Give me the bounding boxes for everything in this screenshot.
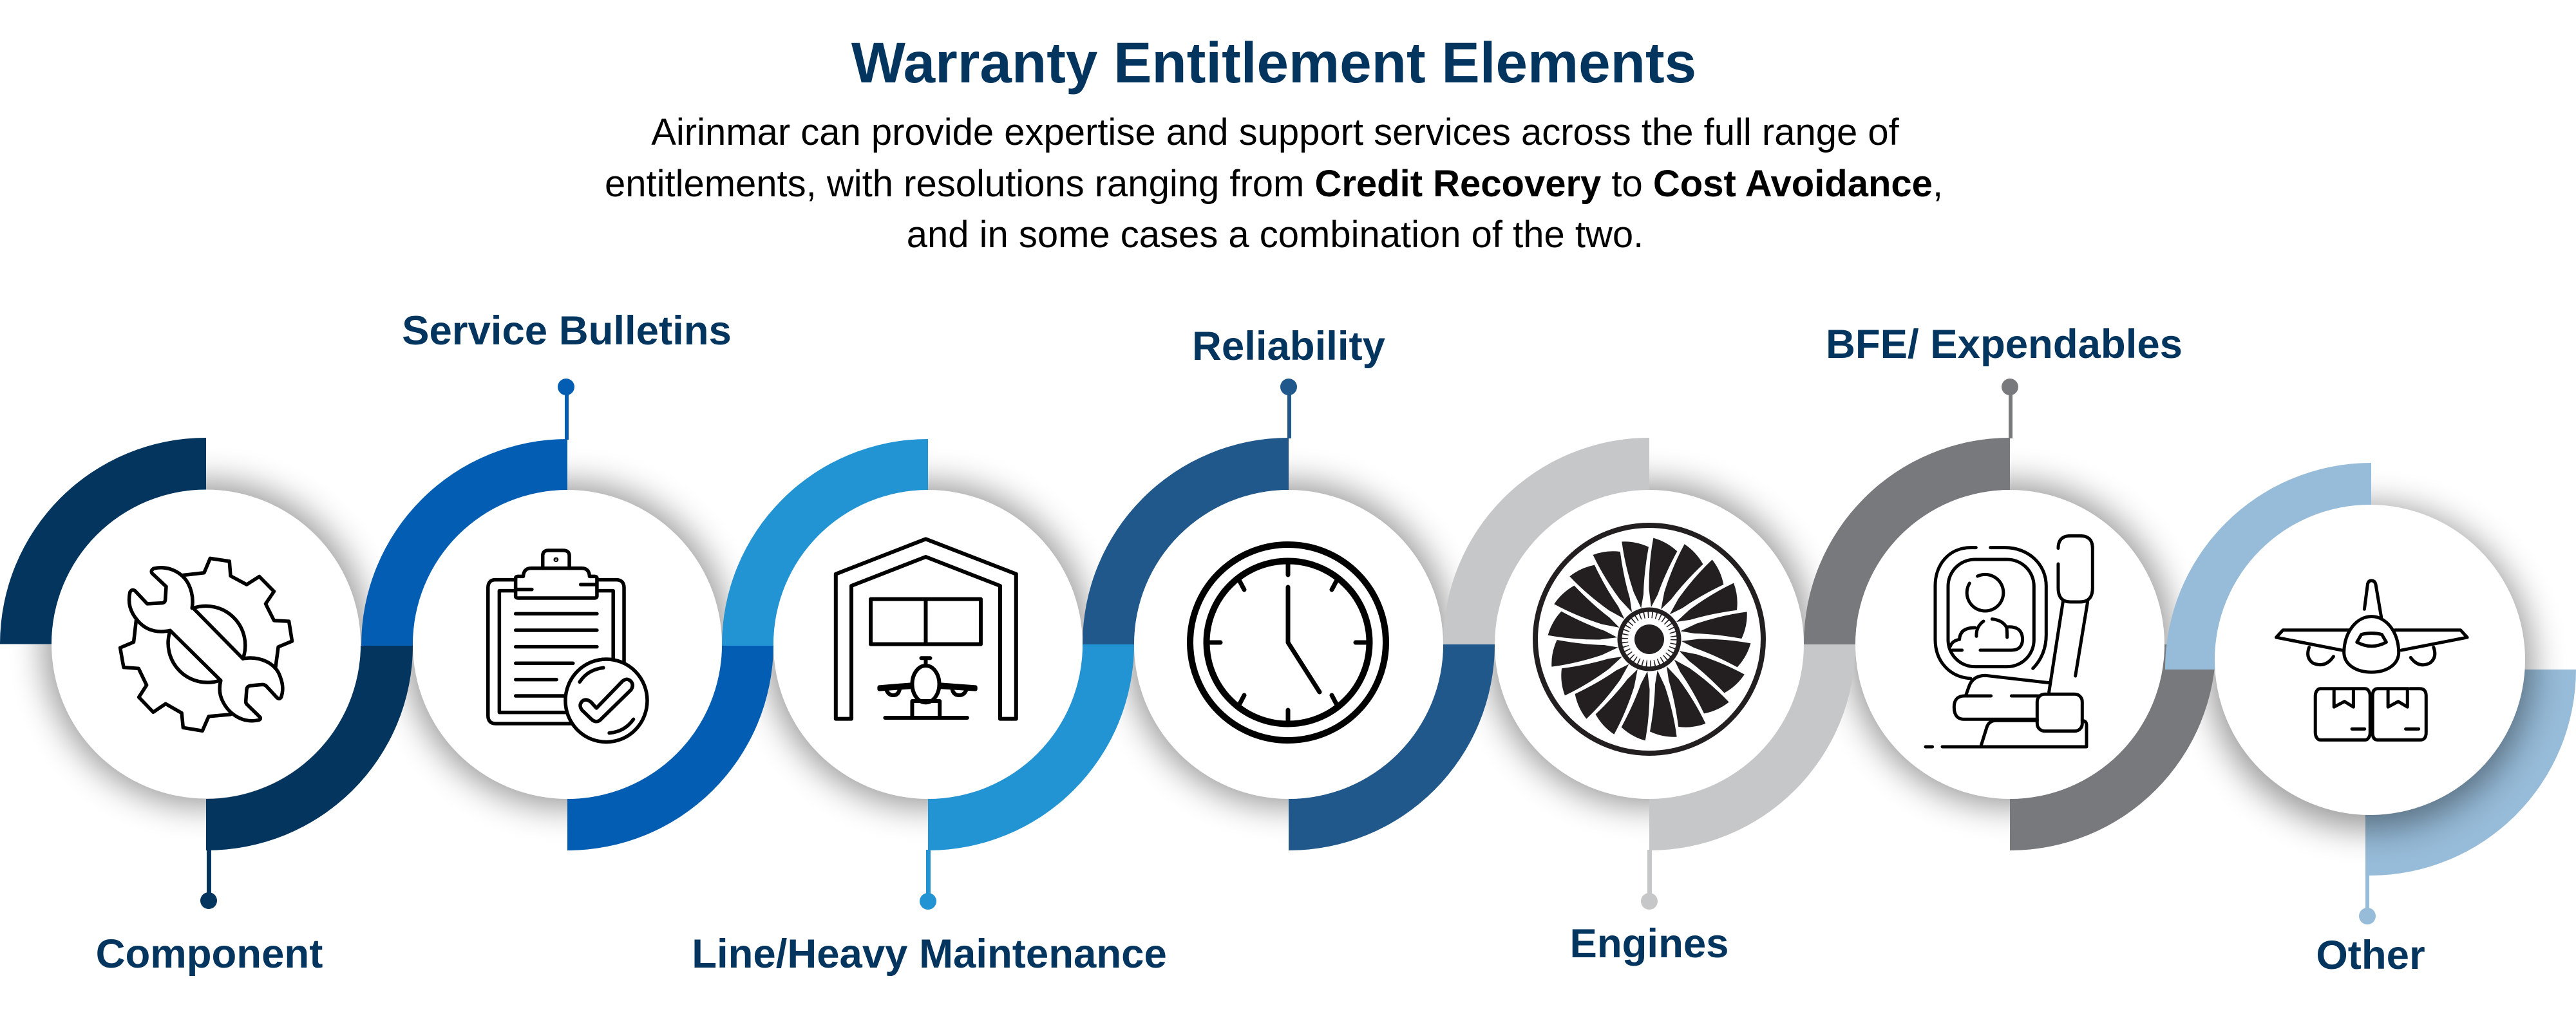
label: BFE / expendables: BFE/ Expendables xyxy=(1826,322,2183,367)
connector: reliability xyxy=(1280,379,1297,438)
title: Warranty Entitlement Elements xyxy=(851,30,1696,95)
label: line/heavy maintenance: Line/Heavy Maintenance xyxy=(692,932,1167,977)
step 3 arcs: line/heavy maintenance xyxy=(722,439,1134,850)
icon: cargo plane and boxes xyxy=(2277,581,2467,740)
icon: clock xyxy=(1190,545,1386,740)
icon: gear and wrench xyxy=(120,558,292,731)
step 5 arcs: engines xyxy=(1443,438,1855,850)
intro text block xyxy=(605,111,1943,256)
intro text block: and in some cases a combination of the two. xyxy=(907,214,1643,256)
step 4 arcs: reliability xyxy=(1083,438,1495,850)
connector: other xyxy=(2359,872,2376,924)
connector: service bulletins xyxy=(558,379,574,440)
label: engines: Engines xyxy=(1570,921,1728,966)
label: service bulletins: Service Bulletins xyxy=(402,308,732,353)
connector: line/heavy maintenance xyxy=(920,850,936,910)
label: component: Component xyxy=(96,932,323,977)
connector: BFE xyxy=(2002,379,2018,438)
step 2 arcs: service bulletins xyxy=(361,439,773,850)
circle drop shadows xyxy=(44,482,2172,807)
label: other: Other xyxy=(2316,933,2425,978)
intro text block: entitlements, with resolutions ranging from Credit Recovery to Cost Avoidance, xyxy=(605,163,1943,205)
label: reliability: Reliability xyxy=(1192,324,1385,369)
step 7 upper arc: other xyxy=(2165,463,2371,670)
icon: hangar with aircraft xyxy=(836,539,1016,719)
step 1 arcs: component xyxy=(0,438,413,850)
icon: turbofan engine xyxy=(1535,525,1763,753)
icon: aircraft seat and window xyxy=(1926,536,2092,747)
connector: component xyxy=(200,850,217,909)
intro text block: Airinmar can provide expertise and support services across the full range of xyxy=(651,111,1900,153)
step 6 arcs: BFE / expendables xyxy=(1804,438,2216,850)
connector: engines xyxy=(1641,850,1658,910)
icon: clipboard with check xyxy=(488,550,647,742)
step 7 lower arc xyxy=(2365,670,2576,876)
white circles xyxy=(52,489,2525,815)
step 7 shadow xyxy=(2208,505,2532,829)
